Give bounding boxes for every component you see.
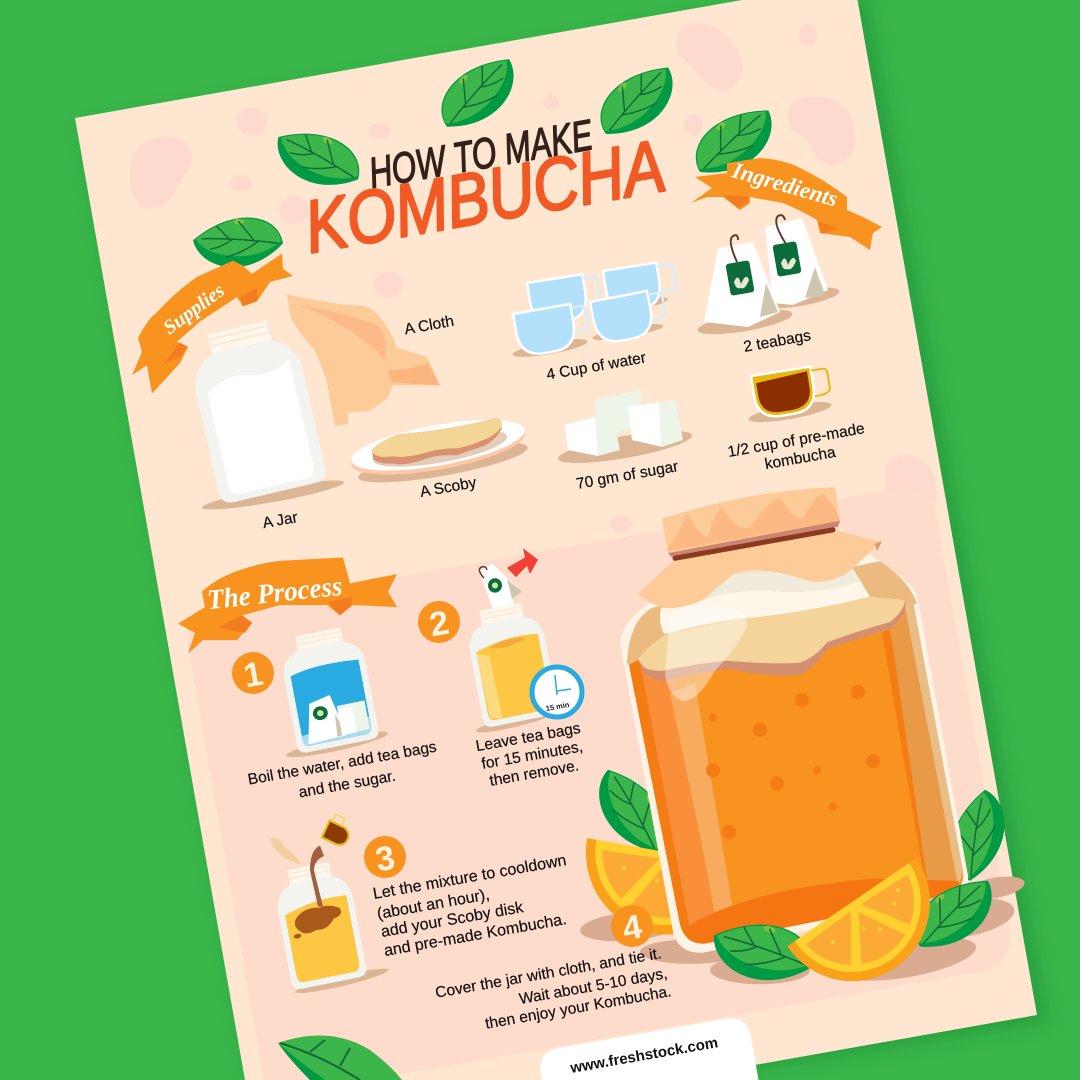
icon: leaf front right bbox=[902, 862, 1006, 966]
icon: leaf left of title bbox=[267, 115, 369, 202]
step 2 text: Leave tea bags bbox=[475, 720, 582, 755]
step 1 number: 1 bbox=[241, 655, 266, 695]
step 2 text bbox=[475, 720, 584, 790]
icon: orange slice left bbox=[573, 838, 747, 948]
ingredient: four cups of water bbox=[512, 260, 679, 361]
title: how to make: HOW TO MAKE bbox=[365, 111, 597, 198]
icon: leaf ingredients bbox=[683, 92, 786, 191]
icon: orange slice right bbox=[787, 858, 960, 1012]
step 2 jar bbox=[463, 599, 559, 736]
icon: 15 min clock: 15 min bbox=[545, 700, 570, 713]
large jar illustration bbox=[573, 487, 1026, 1012]
step 2 teabag bbox=[479, 564, 522, 612]
step 4 text: Wait about 5-10 days, bbox=[518, 965, 669, 1008]
supply: cloth bbox=[287, 294, 440, 426]
icon: leaf front left bbox=[705, 909, 820, 995]
step 3 text: and pre-made Kombucha. bbox=[383, 911, 568, 960]
step 1 text: Boil the water, add tea bags bbox=[247, 739, 438, 789]
scoby layer bbox=[638, 597, 905, 681]
step 4 text: then enjoy your Kombucha. bbox=[484, 983, 673, 1033]
icon: leaf bottom bbox=[278, 1035, 402, 1080]
ingredient: two teabags bbox=[696, 215, 841, 339]
supplies illustrations bbox=[132, 42, 530, 515]
label: 4 cup of water: 4 Cup of water bbox=[545, 349, 647, 384]
bubbles bbox=[706, 685, 880, 839]
panel: process background bbox=[188, 489, 1010, 1080]
step 3 jar bbox=[271, 859, 390, 997]
cream foam bbox=[660, 568, 870, 634]
step 3 pouring stream bbox=[310, 846, 324, 907]
icon: leaf behind jar left bbox=[585, 756, 679, 866]
step 4 text bbox=[434, 945, 673, 1033]
jar shadows bbox=[579, 873, 1026, 989]
ribbon: supplies: Supplies bbox=[159, 279, 229, 339]
step 4 text: Cover the jar with cloth, and tie it. bbox=[434, 945, 663, 1002]
icon: leaf supplies bbox=[192, 216, 284, 269]
step 1 number bbox=[232, 652, 274, 695]
icon: leaf behind jar right bbox=[946, 786, 1010, 885]
label: half cup of pre-made kombucha: 1/2 cup of pre-made bbox=[726, 420, 866, 461]
step 2 number bbox=[418, 601, 460, 644]
step 2 number: 2 bbox=[427, 604, 452, 644]
step 1 text: and the sugar. bbox=[297, 768, 397, 801]
liquid bottom bbox=[683, 879, 960, 944]
ribbon: the process bbox=[178, 558, 397, 654]
title: kombucha: KOMBUCHA bbox=[298, 124, 671, 269]
step 3 number: 3 bbox=[373, 839, 398, 879]
step 2 text: then remove. bbox=[488, 757, 580, 790]
jar shoulder bbox=[627, 561, 917, 665]
ribbon: supplies bbox=[132, 254, 293, 394]
step 4 number bbox=[611, 905, 653, 948]
ribbon: ingredients: Ingredients bbox=[729, 157, 841, 212]
label: a scoby: A Scoby bbox=[419, 474, 478, 501]
background blobs bbox=[130, 23, 937, 532]
step 3 small cup bbox=[322, 813, 355, 848]
process illustrations bbox=[178, 548, 559, 997]
icon: leaf right of title bbox=[588, 51, 687, 151]
cloth lid bbox=[662, 487, 840, 553]
step 4 number: 4 bbox=[620, 908, 645, 948]
label: 70 gm of sugar: 70 gm of sugar bbox=[575, 458, 680, 493]
icon: red arrow bbox=[507, 548, 538, 577]
cloth cover bbox=[638, 530, 882, 608]
step 3 text: Let the mixture to cooldown bbox=[372, 852, 568, 903]
supply: jar bbox=[184, 315, 345, 515]
step 2 text: for 15 minutes, bbox=[480, 738, 584, 773]
label: 2 teabags: 2 teabags bbox=[742, 327, 812, 356]
ribbon: ingredients bbox=[691, 157, 882, 250]
step 3 text bbox=[372, 852, 568, 960]
kombucha liquid bbox=[629, 602, 963, 944]
liquid side shading bbox=[629, 602, 963, 942]
step 1 jar bbox=[277, 624, 389, 762]
website pill: www.freshstock.com bbox=[568, 1034, 719, 1077]
step 3 scoby piece bbox=[271, 838, 301, 864]
step 3 text: (about an hour), bbox=[376, 886, 491, 923]
ingredient: cup of pre-made kombucha bbox=[747, 364, 833, 426]
jar glass bbox=[620, 549, 968, 953]
step 3 text: add your Scoby disk bbox=[380, 899, 526, 941]
string bbox=[675, 530, 833, 558]
website pill bbox=[540, 1018, 758, 1080]
ingredient: sugar cubes bbox=[556, 390, 694, 470]
supply: scoby on plate bbox=[348, 410, 530, 491]
label: a cloth: A Cloth bbox=[403, 313, 455, 338]
label: a jar: A Jar bbox=[261, 509, 299, 532]
step 3 number bbox=[364, 836, 406, 879]
glass highlight bbox=[665, 606, 747, 701]
label: half cup of pre-made kombucha: kombucha bbox=[764, 444, 837, 473]
icon: 15 min clock bbox=[532, 667, 582, 717]
foam shade bbox=[703, 568, 860, 600]
ribbon: the process: The Process bbox=[206, 570, 344, 615]
icon: leaf top bbox=[429, 42, 528, 144]
